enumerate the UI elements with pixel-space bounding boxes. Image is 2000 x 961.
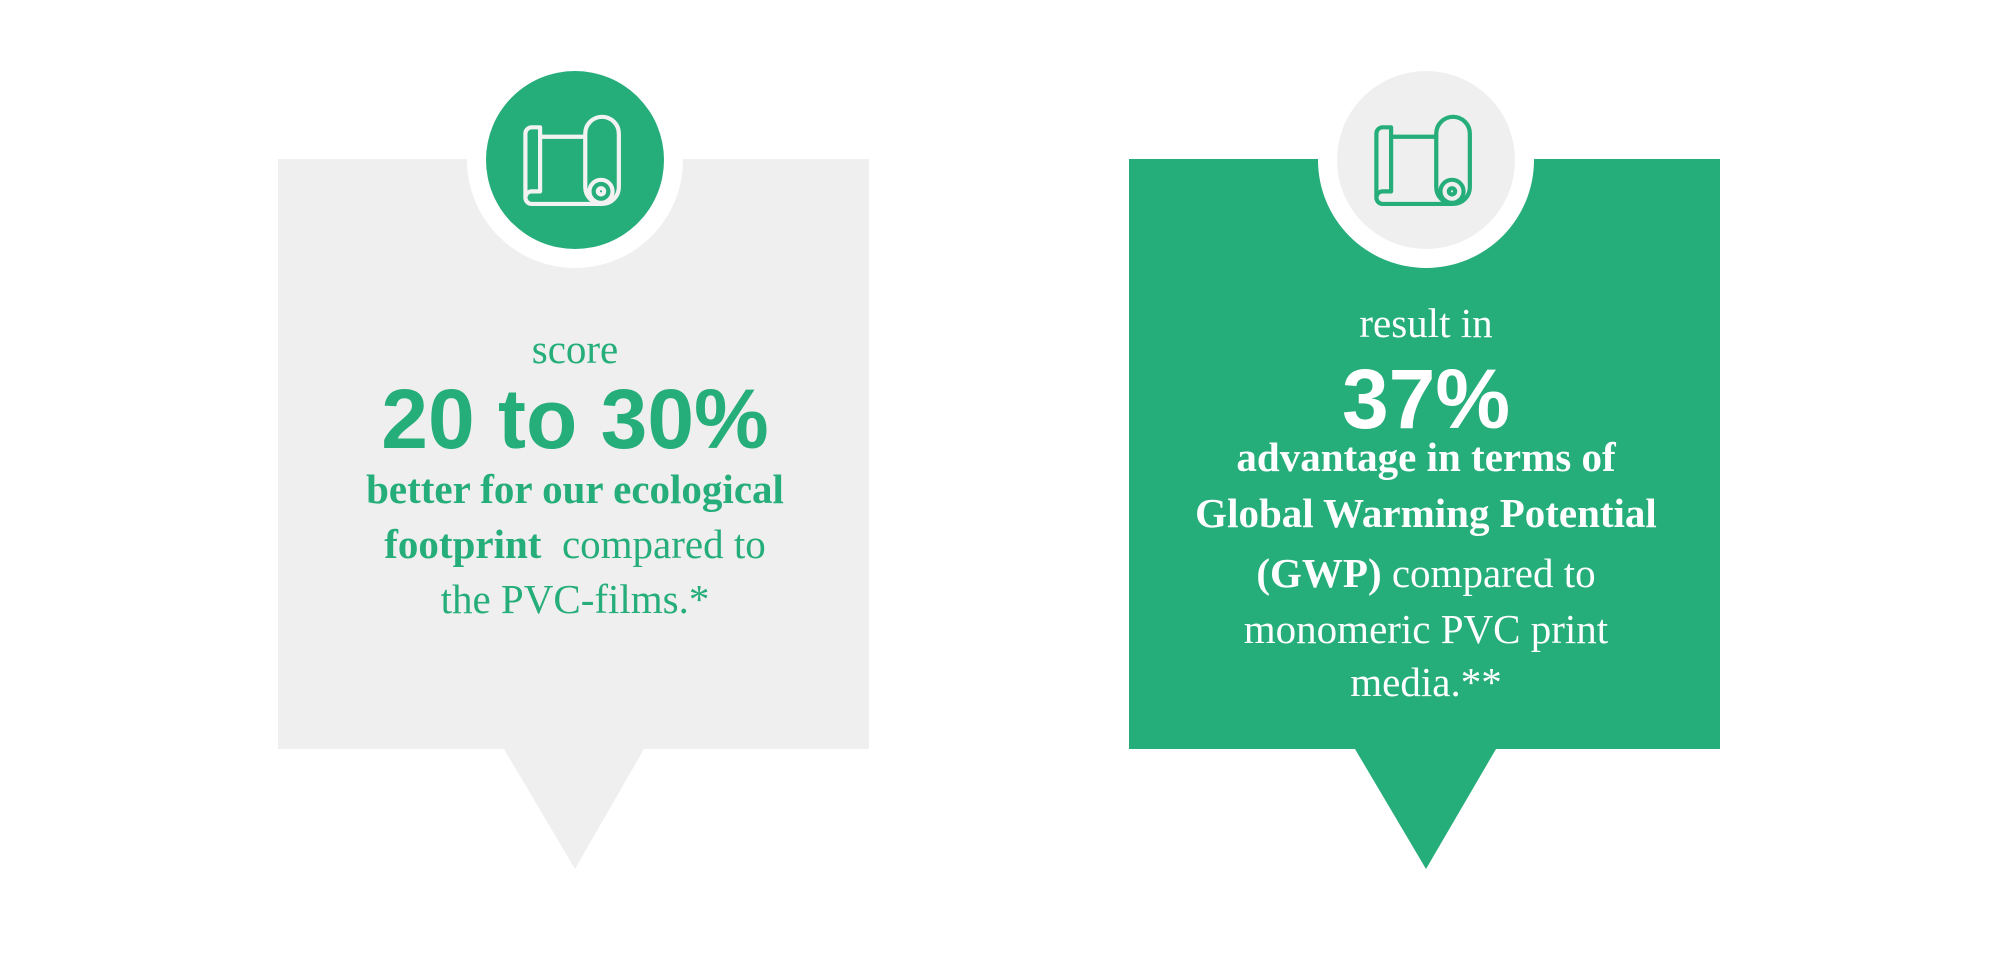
text: right panel: [1195, 300, 1657, 705]
text: left panel: better for our ecological: [366, 466, 784, 512]
text: left panel: 20 to 30%: [381, 372, 769, 466]
text: right panel: 37%: [1342, 352, 1510, 446]
text: left panel: score: [532, 326, 618, 372]
text: right panel: advantage in terms of: [1236, 434, 1616, 480]
text: left panel: footprint compared to: [384, 521, 766, 567]
text: left panel: [366, 326, 784, 622]
icon: right roll: [1374, 114, 1472, 206]
text: right panel: Global Warming Potential: [1195, 490, 1657, 536]
text: left panel: the PVC-films.*: [441, 576, 709, 622]
text: right panel: (GWP) compared to: [1256, 550, 1596, 596]
text: right panel: monomeric PVC print: [1244, 606, 1608, 652]
text: right panel: result in: [1359, 300, 1493, 346]
icon: left roll: [523, 114, 621, 206]
text: right panel: media.**: [1350, 659, 1502, 705]
